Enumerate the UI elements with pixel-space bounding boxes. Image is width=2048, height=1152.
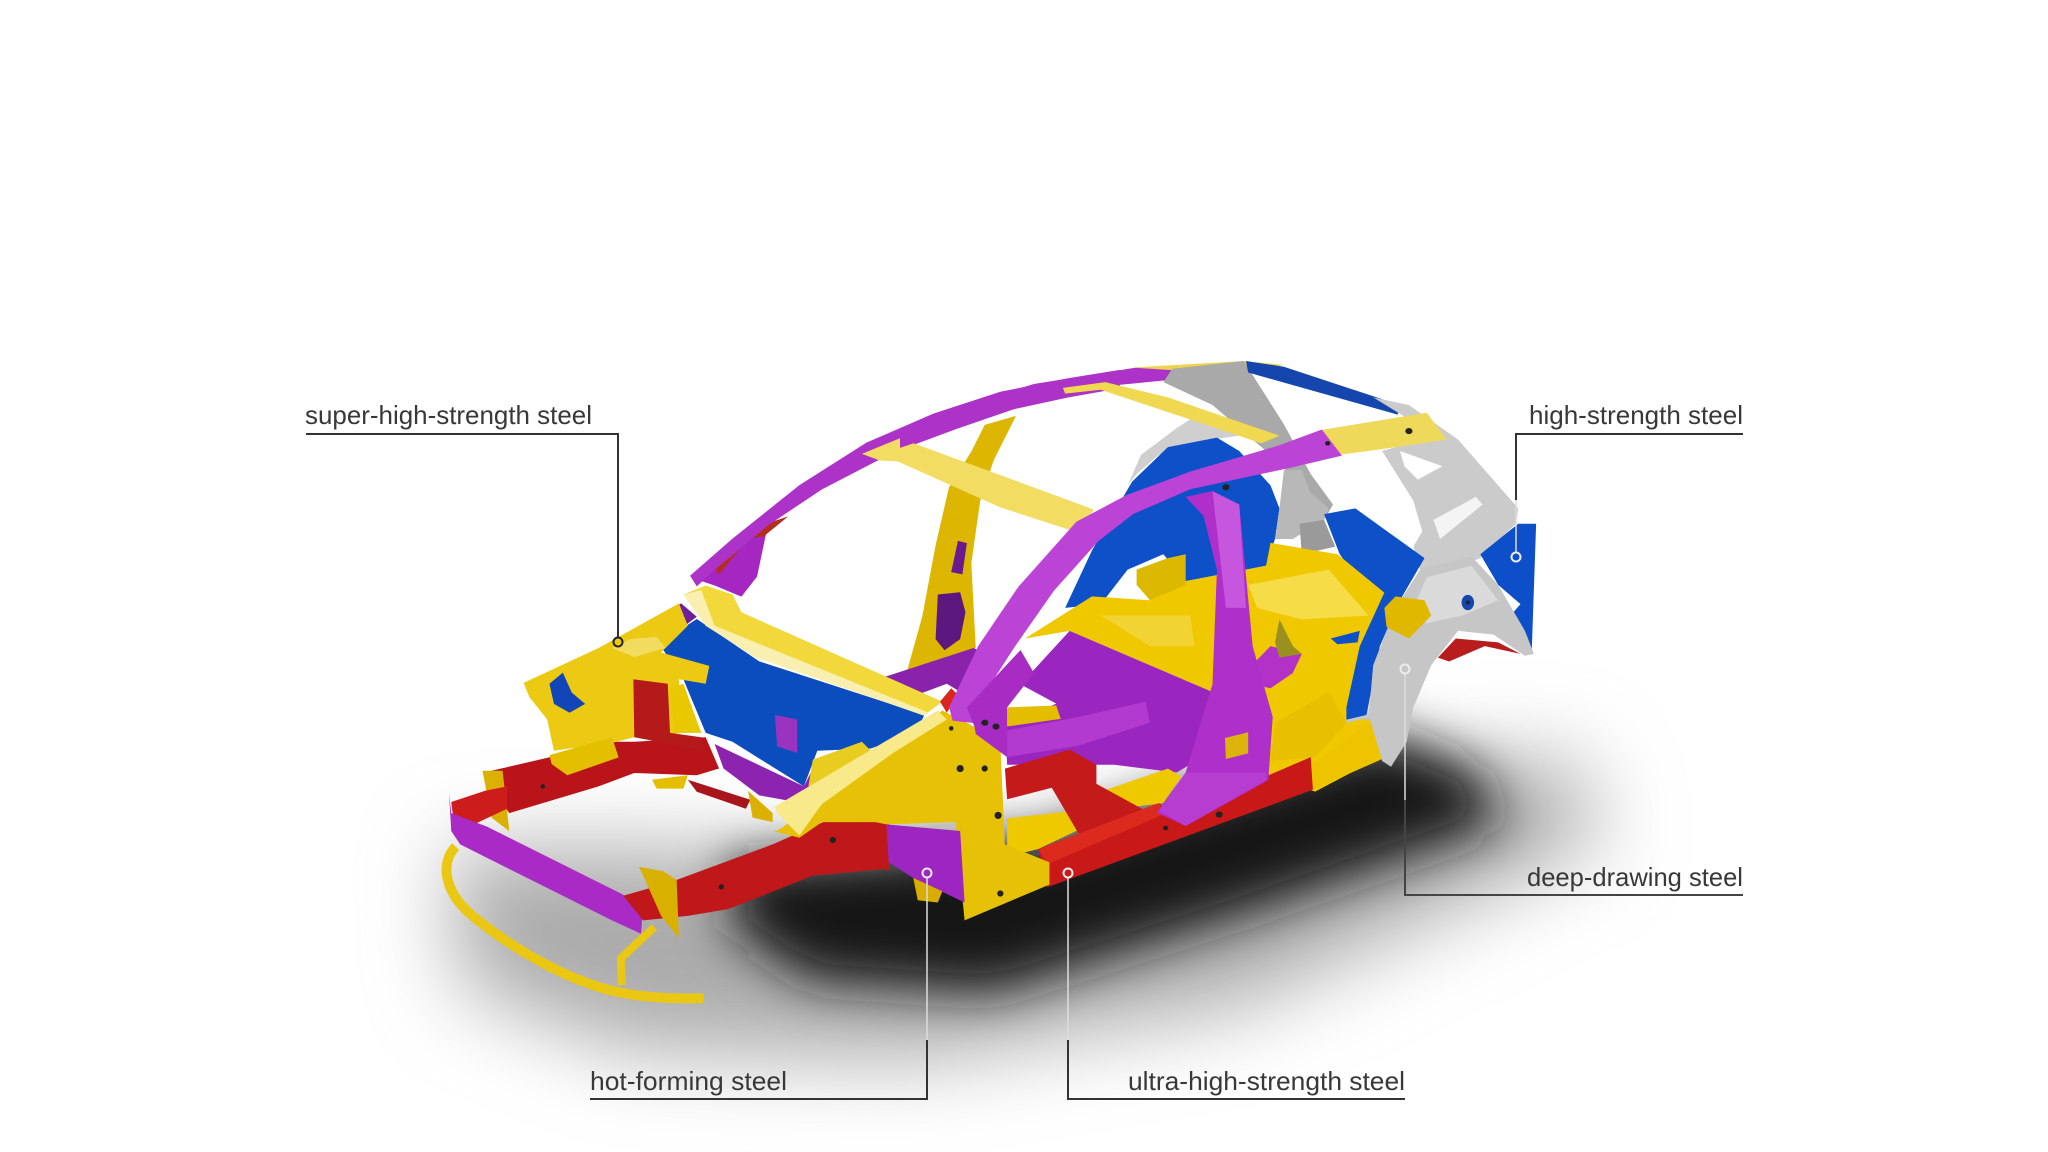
- front section and strut: [446, 586, 1049, 998]
- label: deep-drawing steel: deep-drawing steel: [1527, 862, 1743, 892]
- label: hot-forming steel: [590, 868, 932, 1099]
- label: high-strength steel: [1512, 400, 1743, 562]
- car body structure: [446, 361, 1536, 998]
- near roof rail and centre pillar: [949, 428, 1470, 830]
- far side body (rear section): [900, 361, 1536, 887]
- label: super-high-strength steel: [305, 400, 622, 646]
- front holes: [541, 726, 1003, 897]
- far side body (front section): [690, 370, 1120, 697]
- label: ultra-high-strength steel: ultra-high-strength steel: [1128, 1066, 1405, 1096]
- label: deep-drawing steel: [1400, 664, 1743, 895]
- label: high-strength steel: high-strength steel: [1529, 400, 1743, 430]
- floor shadow: [450, 731, 1606, 1060]
- label: ultra-high-strength steel: [1064, 868, 1405, 1099]
- label: hot-forming steel: hot-forming steel: [590, 1066, 787, 1096]
- centre pillar holes: [981, 428, 1470, 830]
- label: super-high-strength steel: super-high-strength steel: [305, 400, 592, 430]
